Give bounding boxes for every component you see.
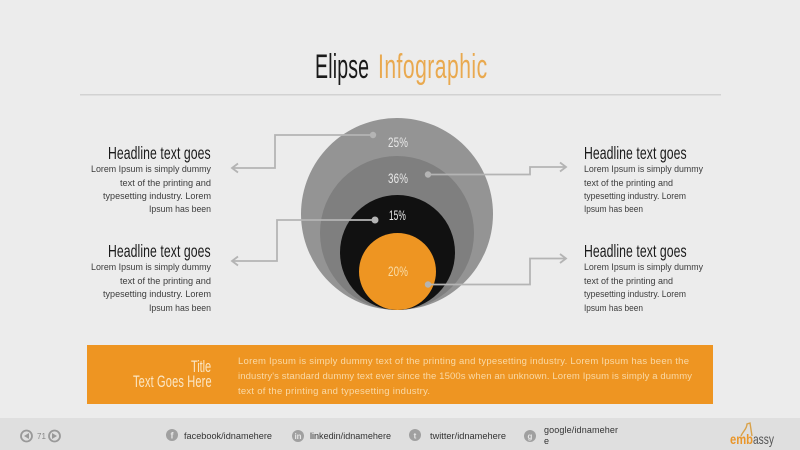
social: twitter: t (414, 432, 417, 440)
text block: top left: Ipsum has been (149, 204, 211, 214)
social: linkedin (292, 430, 391, 442)
arrow: bottom right (425, 254, 566, 288)
ellipse: 25% (301, 118, 493, 310)
banner text: industry's standard dummy text ever since the 1500s when an unknown. Lorem Ipsum is simply a dummy (238, 371, 692, 382)
text block: bottom right (584, 242, 703, 313)
text block: top left: typesetting industry. Lorem (103, 191, 211, 201)
title (315, 47, 487, 85)
social: facebook (166, 429, 272, 441)
panel: orange banner (87, 345, 713, 404)
label: 36%: 36% (388, 170, 408, 186)
text block: bottom left: typesetting industry. Lorem (103, 289, 211, 299)
social: facebook: f (170, 430, 174, 440)
arrow: bottom left (232, 216, 378, 266)
text block: top left: text of the printing and (120, 178, 211, 188)
text block: top right: Headline text goes (584, 144, 687, 164)
text block: bottom left: text of the printing and (120, 276, 211, 286)
social: google (524, 425, 618, 446)
banner text: Lorem Ipsum is simply dummy text of the printing and typesetting industry. Lorem Ipsum has been the (238, 356, 689, 367)
text block: top right: Lorem Ipsum is simply dummy (584, 164, 703, 174)
ellipse: 20% (359, 233, 436, 310)
social: linkedin: in (294, 432, 302, 441)
title: Infographic (378, 47, 487, 85)
banner title: Title (191, 358, 211, 377)
social: google: e (544, 436, 549, 446)
text block: bottom right: Ipsum has been (584, 303, 643, 313)
text block: bottom left: Ipsum has been (149, 303, 211, 313)
logo: embassy: assy (753, 431, 774, 447)
logo: embassy (730, 423, 774, 447)
label: 25%: 25% (388, 134, 408, 150)
text block: top right: text of the printing and (584, 178, 673, 188)
ellipse: 36% (320, 156, 474, 310)
text block: bottom left (91, 242, 211, 313)
text block: bottom right: Headline text goes (584, 242, 687, 262)
text block: top left: Headline text goes (108, 144, 211, 164)
text block: bottom right: typesetting industry. Lorem (584, 289, 686, 299)
text block: bottom left: Lorem Ipsum is simply dummy (91, 262, 211, 272)
social: google: g (528, 432, 533, 441)
title: Elipse (315, 47, 369, 85)
logo: embassy: emb (730, 431, 753, 447)
social: linkedin: linkedin/idnamehere (310, 431, 391, 441)
pager (21, 430, 60, 442)
banner text (238, 356, 692, 397)
pager: 71 (37, 432, 46, 441)
text block: top left: Lorem Ipsum is simply dummy (91, 164, 211, 174)
text block: top right: typesetting industry. Lorem (584, 191, 686, 201)
banner title (133, 358, 212, 392)
social: twitter: twitter/idnamehere (430, 431, 506, 441)
label: 15%: 15% (389, 209, 406, 224)
text block: bottom right: text of the printing and (584, 276, 673, 286)
footer bar (0, 418, 800, 450)
social: twitter (409, 429, 506, 441)
text block: bottom left: Headline text goes (108, 242, 211, 262)
text block: top left (91, 144, 211, 214)
banner text: text of the printing and typesetting industry. (238, 386, 430, 397)
chart: nested ellipses (301, 118, 493, 310)
banner title: Text Goes Here (133, 373, 212, 392)
text block: top right (584, 144, 703, 214)
arrow: top right (425, 162, 566, 178)
ellipse: 15% (340, 195, 455, 310)
text block: top right: Ipsum has been (584, 204, 643, 214)
text block: bottom right: Lorem Ipsum is simply dummy (584, 262, 703, 272)
social: google: google/idnameher (544, 425, 618, 435)
social: facebook: facebook/idnamehere (184, 431, 272, 441)
label: 20%: 20% (388, 263, 408, 279)
arrow: top left (232, 132, 376, 172)
